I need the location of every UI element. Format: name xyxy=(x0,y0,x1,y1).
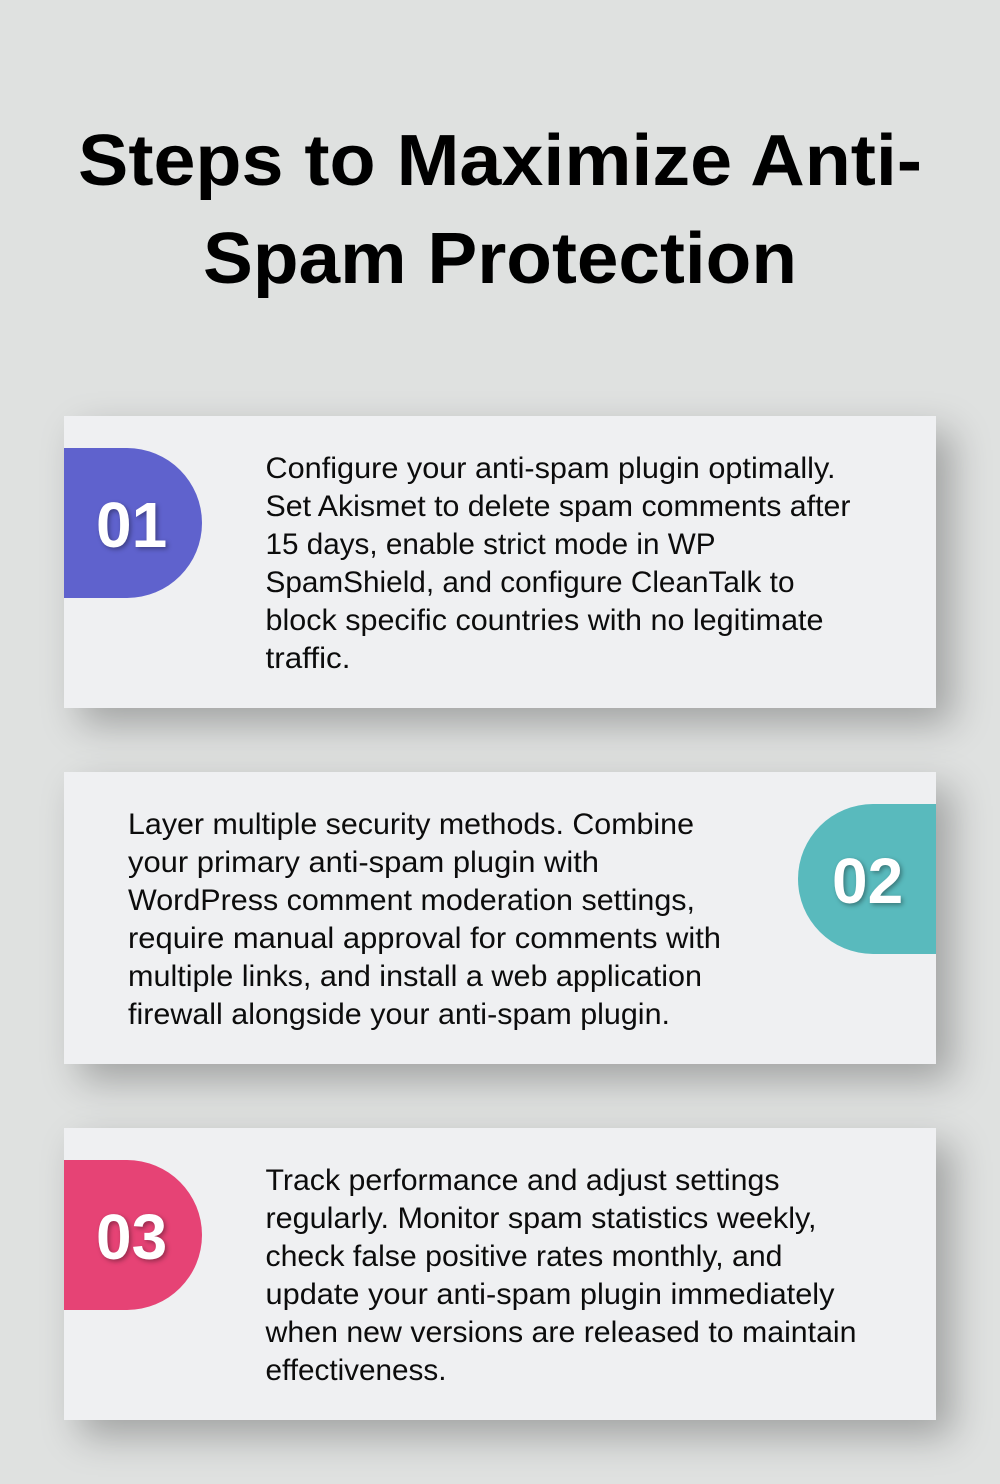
badge: 01 xyxy=(64,448,202,598)
text: step 03 description: update your anti-spam plugin immediately xyxy=(266,1278,834,1311)
text: step 03 description: effectiveness. xyxy=(266,1354,446,1387)
panel: step 03 xyxy=(64,1128,936,1420)
badge: 03 xyxy=(64,1160,202,1310)
text: step 03 description: regularly. Monitor spam statistics weekly, xyxy=(266,1202,816,1235)
badge: 02 xyxy=(798,804,936,954)
badge: 02: 02 xyxy=(832,845,903,917)
text: step 02 description: your primary anti-spam plugin with xyxy=(128,846,599,879)
text: step 01 description: Set Akismet to delete spam comments after xyxy=(266,490,851,523)
text: step 03 description: check false positive rates monthly, and xyxy=(266,1240,782,1273)
text: step 01 description xyxy=(266,452,851,675)
panel: step 02 xyxy=(64,772,936,1064)
text: step 02 description: require manual approval for comments with xyxy=(128,922,721,955)
title: Steps to Maximize Anti- xyxy=(78,121,922,201)
title: Spam Protection xyxy=(203,219,797,299)
text: step 01 description: 15 days, enable strict mode in WP xyxy=(266,528,716,561)
text: step 02 description xyxy=(128,808,721,1031)
title xyxy=(78,121,922,299)
badge: 01: 01 xyxy=(96,489,167,561)
panel: step 01 xyxy=(64,416,936,708)
text: step 01 description: traffic. xyxy=(266,642,350,675)
text: step 02 description: WordPress comment moderation settings, xyxy=(128,884,695,917)
text: step 03 description xyxy=(264,1164,856,1387)
text: step 03 description: when new versions are released to maintain xyxy=(264,1316,856,1349)
text: step 02 description: multiple links, and install a web application xyxy=(128,960,702,993)
badge: 03: 03 xyxy=(96,1201,167,1273)
text: step 02 description: firewall alongside your anti-spam plugin. xyxy=(128,998,670,1031)
text: step 01 description: Configure your anti-spam plugin optimally. xyxy=(266,452,836,485)
text: step 01 description: block specific countries with no legitimate xyxy=(266,604,824,637)
text: step 01 description: SpamShield, and configure CleanTalk to xyxy=(266,566,794,599)
text: step 03 description: Track performance and adjust settings xyxy=(266,1164,780,1197)
text: step 02 description: Layer multiple security methods. Combine xyxy=(128,808,694,841)
